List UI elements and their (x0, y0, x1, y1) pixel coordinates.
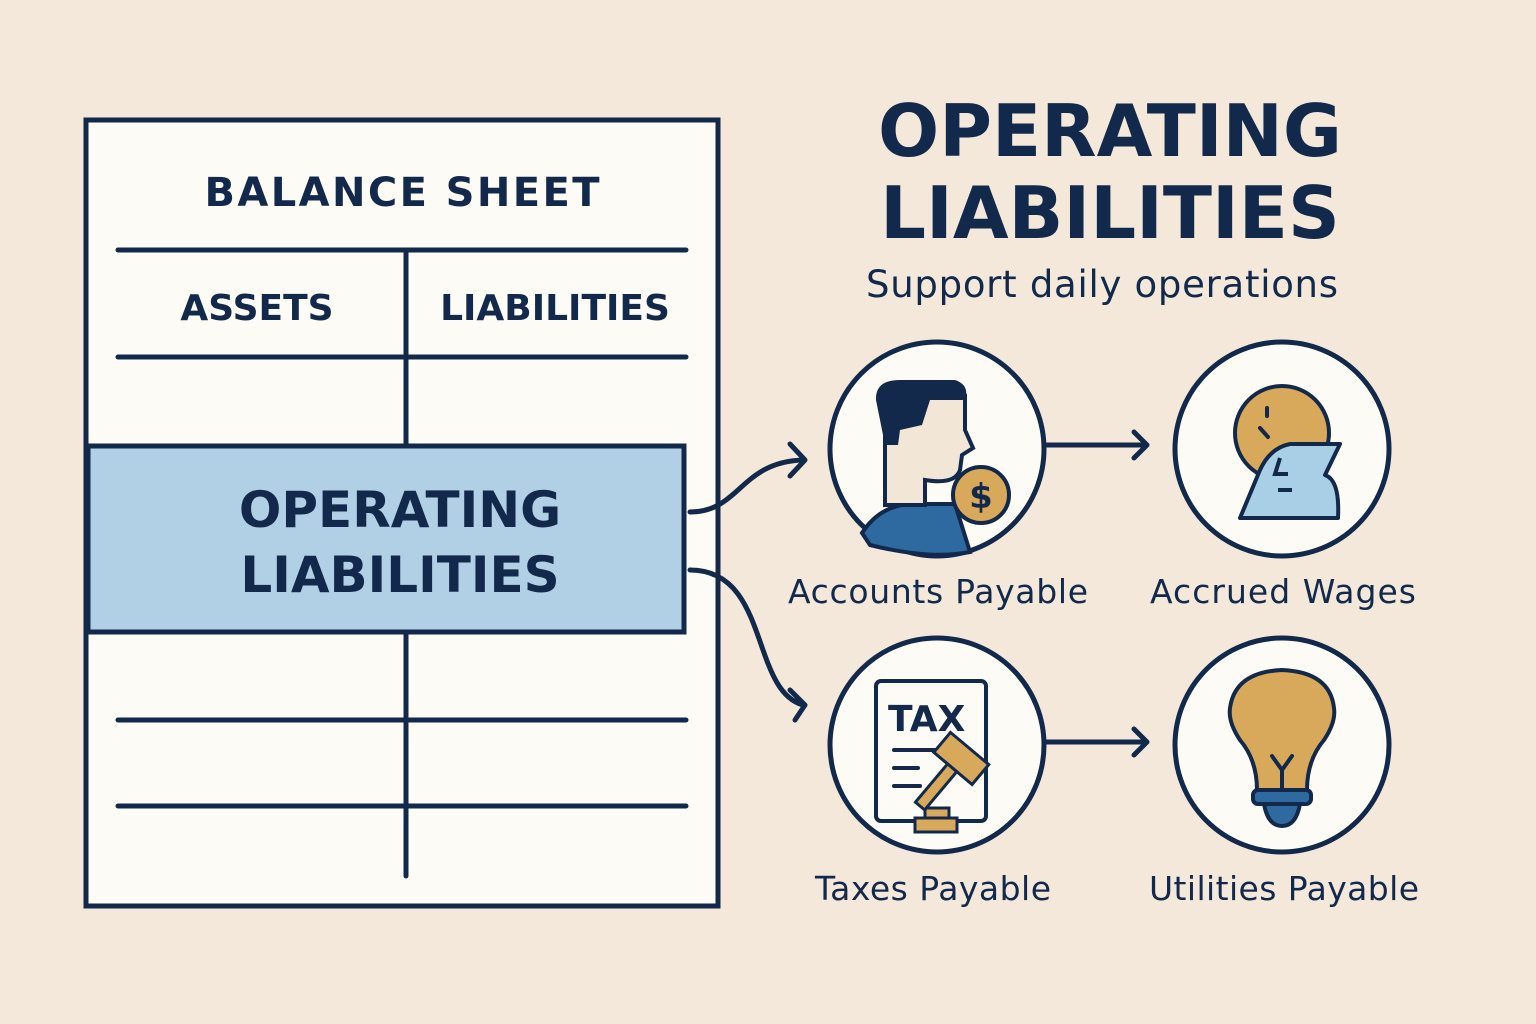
arrow: taxes to utilities (1047, 729, 1147, 755)
panel: balance sheet (86, 120, 718, 906)
arrow: to accounts payable (690, 444, 805, 512)
title: OPERATING (878, 89, 1342, 173)
heading: balance sheet: BALANCE SHEET (204, 170, 600, 216)
highlight box: operating liabilities (88, 446, 684, 632)
icon: light bulb (1175, 638, 1389, 852)
label: accrued wages: Accrued Wages (1150, 572, 1416, 611)
title: LIABILITIES (880, 171, 1340, 255)
highlight box: operating liabilities: LIABILITIES (240, 546, 560, 604)
icon: taxes payable: TAX (888, 699, 966, 740)
label: utilities payable: Utilities Payable (1149, 869, 1419, 908)
highlight box: operating liabilities: OPERATING (239, 481, 561, 539)
subtitle: Support daily operations (866, 263, 1338, 306)
icon: accounts payable (830, 342, 1044, 556)
label: taxes payable: Taxes Payable (814, 869, 1051, 908)
title (878, 89, 1342, 255)
arrow: accounts payable to accrued wages (1047, 432, 1147, 458)
icon: accounts payable: $ (969, 477, 993, 517)
icon: taxes payable (830, 638, 1044, 852)
column header: assets: ASSETS (180, 288, 334, 329)
column header: liabilities: LIABILITIES (440, 288, 670, 329)
icon: accrued wages (1175, 342, 1389, 556)
arrow: to taxes payable (690, 570, 805, 720)
label: accounts payable: Accounts Payable (788, 572, 1088, 611)
